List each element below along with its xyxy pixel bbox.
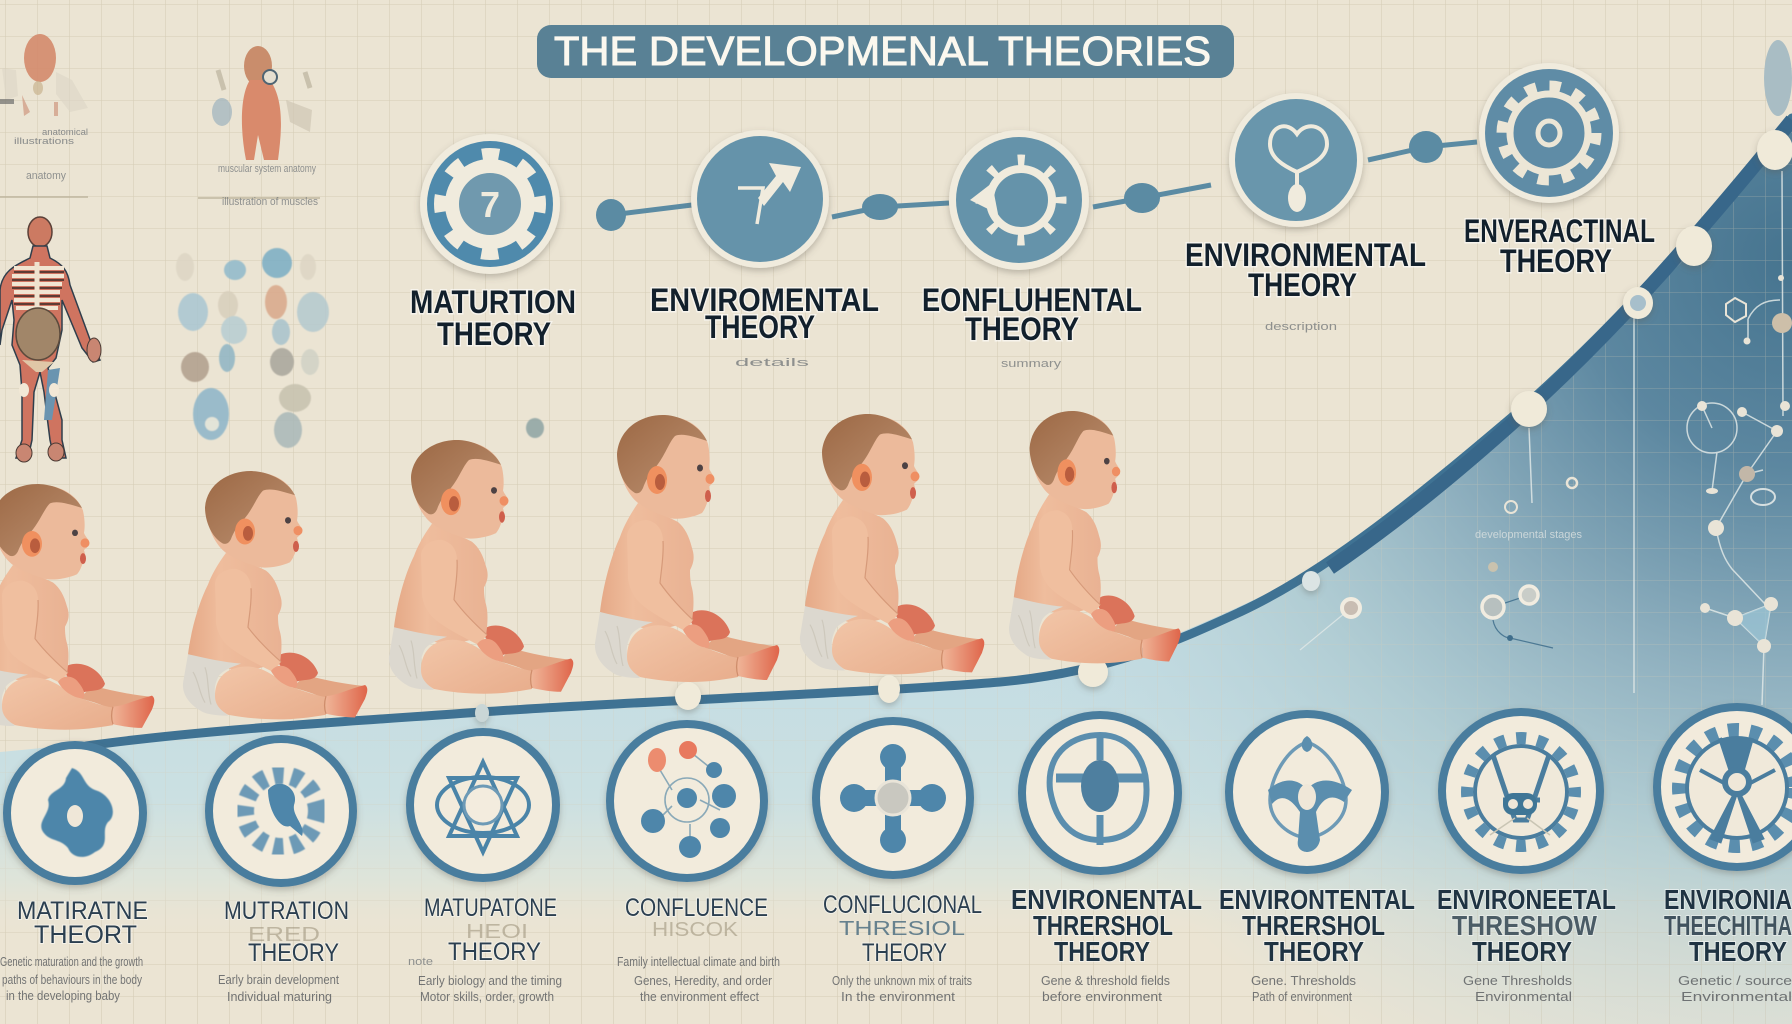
top theory 4: environmental [1185,93,1426,333]
bottom theory 5: confluctional: THEORY [862,939,947,967]
bottom theory 8: environeetal thresh [1437,712,1616,1004]
description: Gene. Thresholds [1251,974,1356,988]
bottom theory 5: confluctional [816,721,982,1004]
bottom theory 8: environeetal thresh: Environmental [1475,990,1572,1004]
label: MUTRATION [224,897,349,925]
label: ENVIRONEETAL [1437,884,1616,915]
bottom theory 1: matiratne [0,745,148,1003]
anatomy sketch: muscle figure, top [198,46,320,208]
label: EONFLUHENTAL [922,282,1142,318]
bottom theory 9: environial theechitha: Environmental [1681,990,1792,1004]
top theory 1: maturtion: THEORY [437,316,551,352]
bottom theory 4: confluence: Genes, Heredity, and order [634,974,772,988]
top theory 3: confluental [922,130,1142,370]
anatomy sketch: muscle figure, top: muscular system anatomy [218,163,316,175]
title banner: THE DEVELOPMENAL THEORIES [554,28,1211,74]
baby 3 [389,440,573,694]
icon: three lobes [1229,714,1385,870]
connector 2 [832,194,949,220]
top theory 3: confluental: THEORY [965,311,1079,347]
label: CONFLUENCE [625,894,768,922]
description: Gene Thresholds [1463,974,1572,988]
icon: ring with spokes [1022,715,1178,871]
bottom theory 4: confluence: HISCOK [652,919,739,941]
anatomy sketch: head and chart, top left: illustrations [14,136,75,146]
icon: numbered gear: 7 [480,184,500,225]
faded icon cluster [176,248,544,448]
icon: ring gear [949,130,1089,270]
description: Gene & threshold fields [1041,974,1170,988]
description: Family intellectual climate and birth [617,955,780,969]
description: Genetic maturation and the growth [0,955,143,969]
bottom theory 9: environial theechitha [1657,707,1792,1004]
bottom theory 2: mutration: ERED [248,924,320,946]
decorative cap top right [1764,40,1792,116]
icon: gear with face [1442,712,1600,870]
bottom theory 6: environental threshol [1011,715,1202,1004]
description: Only the unknown mix of traits [832,974,972,988]
icon: blob [7,745,143,881]
baby 1 [0,484,154,730]
baby 5 [800,414,984,674]
small caption: details [735,357,810,369]
bottom theory 6: environental threshol: THEORY [1054,936,1150,967]
bottom theory 4: confluence [610,724,780,1004]
top theory 1: maturtion [410,134,576,352]
label: MATURTION [410,284,576,320]
bottom theory 1: matiratne: paths of behaviours in the body [2,973,143,987]
baby 2 [183,471,367,719]
top theory 5: enveractinal: THEORY [1500,243,1612,279]
network diagram, right: developmental stages [1475,529,1582,541]
icon: cross with nodes [816,721,970,875]
label: ENVIRONTENTAL [1219,884,1415,915]
bottom theory 3: maturatone: HEOI [466,921,528,943]
top theory 4: environmental: THEORY [1248,267,1357,303]
anatomy sketch: head and chart, top left: anatomical [42,127,88,137]
icon: heart loop [1229,93,1363,227]
baby 6 [1009,411,1181,663]
connector 1 [596,199,692,231]
top theory 2: environmental: THEORY [705,309,815,345]
small caption: description [1265,321,1337,333]
bottom theory 2: mutration [209,739,353,1004]
bottom theory 6: environental threshol: before environment [1042,990,1163,1004]
label: ENVERACTINAL [1464,213,1655,249]
icon: numbered gear [420,134,560,274]
anatomy sketch: head and chart, top left [0,34,88,197]
label: ENVIRONENTAL [1011,884,1202,915]
label: MATIRATNE [17,897,148,925]
icon: molecule [610,724,764,878]
label: ENVIRONMENTAL [1185,237,1426,273]
icon: fragmented gear [209,739,353,883]
anatomy figure: full body with ribs [0,217,101,462]
description: note [408,956,433,968]
baby 4 [595,415,779,682]
connector 4 [1368,131,1477,163]
description: Early brain development [218,973,339,987]
growth curve line [86,118,1792,746]
icon: wheel gear [1657,707,1792,867]
bottom theory 3: maturatone: Early biology and the timing [418,974,562,988]
bottom theory 8: environeetal thresh: THRESHOW [1452,910,1598,941]
bottom theory 3: maturatone: THEORY [448,938,541,966]
bottom theory 6: environental threshol: THRERSHOL [1033,910,1173,941]
icon: gear with ring [1479,63,1619,203]
bottom theory 7: environtental threshol: Path of environment [1252,990,1352,1004]
network diagram, right [1300,40,1792,705]
bottom theory 4: confluence: the environment effect [640,990,759,1004]
anatomy sketch: head and chart, top left: anatomy [26,170,66,182]
bottom theory 2: mutration: THEORY [248,939,339,967]
label: MATUPATONE [424,894,557,922]
bottom theory 7: environtental threshol: THRERSHOL [1242,910,1385,941]
top theory 5: enveractinal [1464,63,1655,279]
label: CONFLUCIONAL [823,891,982,919]
top theory 2: environmental [650,130,879,369]
connector 3 [1093,183,1211,213]
bottom theory 5: confluctional: In the environment [841,990,956,1004]
bottom theory 3: maturatone [408,732,562,1004]
label: ENVIROMENTAL [650,282,879,318]
bottom theory 5: confluctional: THRESIOL [839,918,965,940]
bottom theory 8: environeetal thresh: THEORY [1472,936,1572,967]
bottom theory 2: mutration: Individual maturing [227,990,332,1004]
icon: star and orbit [410,732,556,878]
icon: arrow disc [691,130,829,268]
bottom theory 7: environtental threshol [1219,714,1415,1004]
bottom theory 1: matiratne: THEORT [34,921,137,949]
bottom theory 7: environtental threshol: THEORY [1264,936,1364,967]
description: Genetic / source [1678,974,1792,988]
nodes on curve [475,130,1792,722]
small caption: summary [1001,358,1062,370]
bottom theory 3: maturatone: Motor skills, order, growth [420,990,554,1004]
bottom theory 1: matiratne: in the developing baby [6,989,121,1003]
anatomy sketch: muscle figure, top: illustration of muscles [222,196,318,208]
